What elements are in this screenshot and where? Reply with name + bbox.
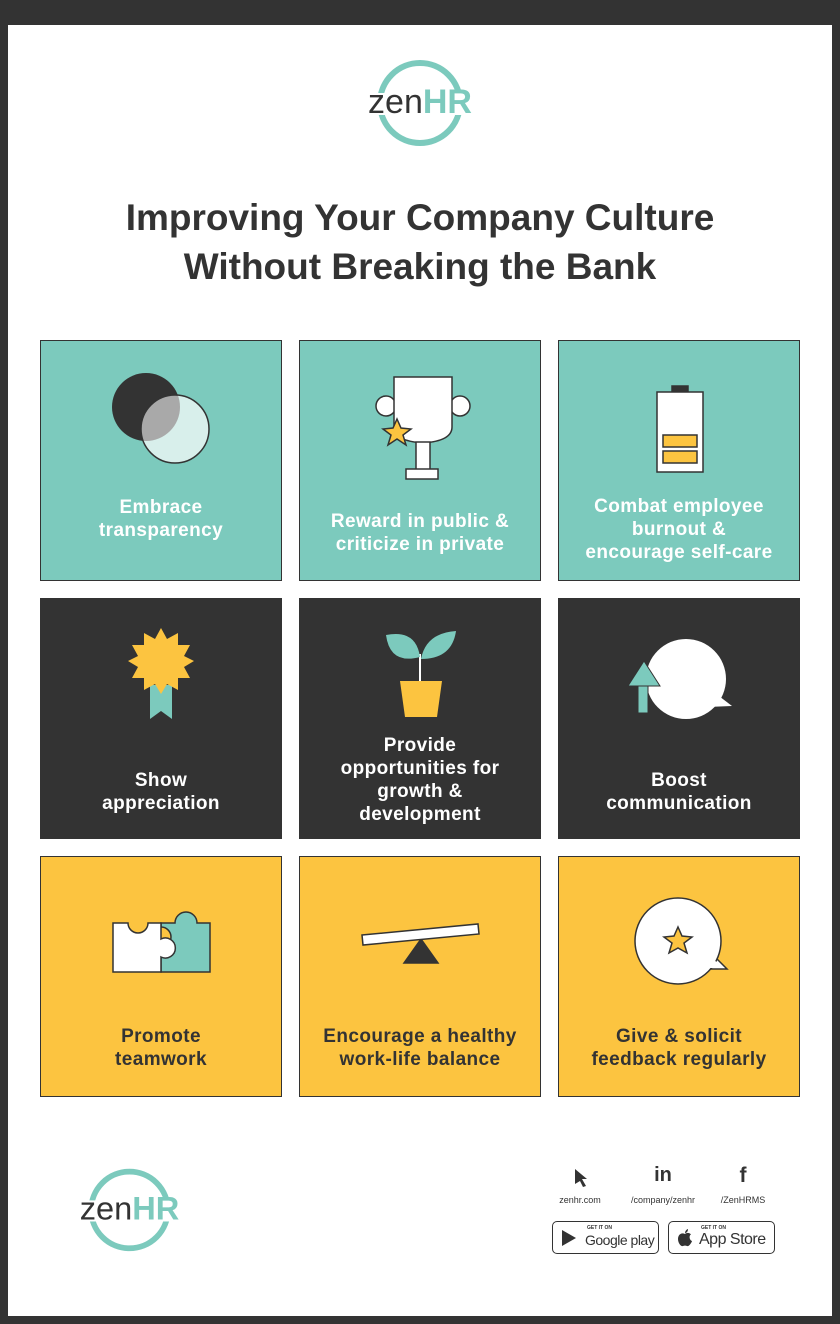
panel: teamwork (40, 856, 282, 1097)
icon: badge (128, 628, 194, 719)
logo: top (368, 60, 472, 146)
panel: appreciation (40, 598, 282, 839)
icon: facebook: f (740, 1164, 746, 1187)
icon: battery (656, 385, 704, 473)
icon: seesaw (361, 923, 480, 964)
panel: reward: criticize in private (336, 534, 504, 555)
panel: teamwork: Promote (121, 1026, 201, 1047)
panel: appreciation: Show (135, 770, 187, 791)
badge: google play (552, 1221, 659, 1254)
panel: feedback: feedback regularly (591, 1049, 767, 1070)
panel: growth: opportunities for (341, 758, 499, 779)
logo: footer: zenHR (80, 1191, 179, 1227)
panel: feedback: Give & solicit (616, 1026, 742, 1047)
panel: embrace transparency (40, 340, 282, 581)
panel: teamwork: teamwork (115, 1049, 207, 1070)
title: Improving Your Company Culture (126, 197, 714, 238)
social links: /ZenHRMS (721, 1195, 765, 1205)
panel: growth (299, 598, 541, 839)
panel: reward: Reward in public & (331, 511, 509, 532)
panel: growth: Provide (384, 735, 456, 756)
panel: feedback (558, 856, 800, 1097)
icon: linkedin: in (654, 1164, 672, 1186)
panel: communication: communication (606, 793, 752, 814)
social links (552, 1164, 775, 1254)
badge: app store (668, 1221, 775, 1254)
panel: burnout: encourage self-care (585, 542, 773, 563)
panel: growth: development (359, 804, 481, 825)
title (126, 197, 714, 287)
icon: star bubble (634, 897, 729, 985)
logo: top: zenHR (368, 83, 472, 121)
logo: footer (80, 1168, 179, 1252)
panel: embrace transparency: Embrace (119, 497, 203, 518)
panel: reward (299, 340, 541, 581)
panel: appreciation: appreciation (102, 793, 220, 814)
panel: work-life balance: Encourage a healthy (323, 1026, 517, 1047)
badge: app store: GET IT ON (701, 1225, 726, 1231)
panel: work-life balance: work-life balance (340, 1049, 500, 1070)
social links: /company/zenhr (631, 1195, 695, 1205)
panel: embrace transparency: transparency (99, 520, 223, 541)
icon: cursor (575, 1169, 587, 1187)
icon: trophy (375, 376, 471, 480)
panel: growth: growth & (377, 781, 463, 802)
icon: puzzle (112, 911, 211, 973)
badge: app store: App Store (699, 1231, 766, 1248)
panel: burnout: Combat employee (594, 496, 764, 517)
social links: zenhr.com (559, 1195, 601, 1205)
icon: plant (386, 631, 456, 717)
icon: speech bubble arrow (629, 639, 732, 719)
panel: communication (558, 598, 800, 839)
panel: burnout (558, 340, 800, 581)
badge: google play: Google play (585, 1232, 654, 1248)
title: Without Breaking the Bank (184, 246, 656, 287)
panel: work-life balance (299, 856, 541, 1097)
icon: overlapping circles (112, 373, 210, 464)
panel: communication: Boost (651, 770, 707, 791)
badge: google play: GET IT ON (587, 1225, 612, 1231)
panel: burnout: burnout & (632, 519, 726, 540)
